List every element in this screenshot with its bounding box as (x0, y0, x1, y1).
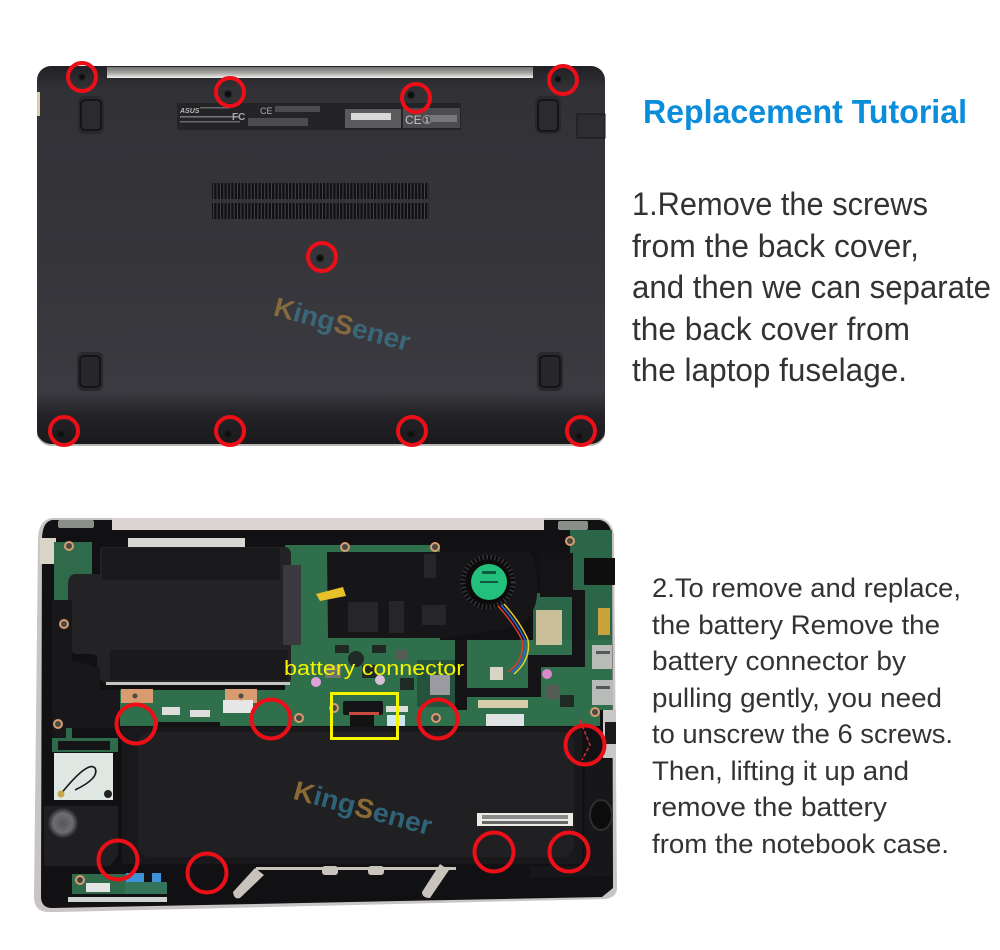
rubber foot: top right (535, 96, 561, 134)
step 2 text: from the notebook case. (652, 829, 949, 859)
regulatory label: ASUS (179, 108, 200, 115)
flat connectors (158, 707, 220, 728)
left speaker (44, 806, 118, 866)
right hinge bracket (558, 521, 588, 530)
heat sink chips (348, 554, 446, 633)
rubber foot: top left (78, 96, 104, 134)
drive side connector (283, 565, 301, 645)
dark cpu surround (417, 660, 455, 707)
watermark: KingSener (271, 292, 414, 357)
main motherboard (120, 545, 612, 726)
heading: Replacement Tutorial (643, 93, 967, 130)
fan wires (498, 604, 528, 674)
screws (58, 74, 582, 439)
battery inner panel (138, 732, 574, 857)
step 2 text (652, 573, 961, 859)
step 2 text: to unscrew the 6 screws. (652, 719, 953, 749)
white sticker (223, 700, 253, 713)
cpu chip (430, 675, 450, 695)
step 1 text: and then we can separate (632, 269, 991, 305)
cable blob (540, 553, 573, 597)
step 2 text: remove the battery (652, 792, 888, 822)
capacitors (311, 669, 552, 687)
rubber foot: bottom left (77, 352, 103, 391)
black chassis interior (41, 520, 613, 908)
panel: laptop back cover (37, 63, 605, 446)
step 1 text: the laptop fuselage. (632, 352, 907, 388)
upper right board (533, 530, 612, 640)
step 1 text: 1.Remove the screws (632, 186, 928, 222)
watermark: KingSener (291, 775, 436, 841)
step 2 text: Then, lifting it up and (652, 756, 909, 786)
step 2 text: battery connector by (652, 646, 907, 676)
silver ribbon (478, 700, 528, 708)
step 1 text (632, 186, 991, 388)
step 1 text: the back cover from (632, 311, 910, 347)
copper screws (54, 537, 599, 728)
step 2 text: the battery Remove the (652, 610, 940, 640)
heat sink (327, 552, 537, 638)
yellow connector label: battery connector (284, 658, 464, 680)
red screw markers (50, 63, 595, 445)
left hinge bracket (58, 520, 94, 528)
step 2 text: 2.To remove and replace, (652, 573, 961, 603)
right wire (580, 720, 590, 760)
regulatory label: FC (232, 112, 245, 123)
battery pack (122, 727, 582, 864)
rubber foot: bottom right (537, 352, 563, 391)
left black wall (52, 600, 120, 740)
laptop base shell (37, 66, 605, 445)
copper board strip (121, 689, 153, 703)
regulatory label (177, 103, 461, 130)
silver chassis (34, 518, 617, 912)
right speaker (530, 760, 612, 878)
cover lower strip (110, 650, 288, 680)
left port notch (37, 92, 40, 116)
hinge bar (112, 518, 544, 530)
right bracket (603, 710, 616, 758)
hinge bar (107, 67, 533, 78)
board chips (325, 645, 574, 707)
step 1 text: from the back cover, (632, 228, 919, 264)
cooling fan (461, 555, 515, 609)
regulatory label: CE (260, 106, 273, 116)
yellow tape (316, 587, 346, 601)
battery connector plug (343, 701, 408, 727)
black heat pipe (455, 590, 585, 710)
touchpad metal tabs (233, 864, 456, 898)
ventilation slots (212, 183, 429, 219)
silver shield (536, 610, 562, 645)
battery label (477, 813, 573, 826)
red screw markers (98, 700, 604, 892)
fan connector (490, 667, 503, 680)
cover upper tab (102, 548, 280, 580)
panel: laptop interior (34, 518, 617, 912)
yellow connector box (332, 694, 398, 738)
step 2 text: pulling gently, you need (652, 683, 942, 713)
left motherboard strip (52, 542, 92, 740)
drive bay black cover (68, 547, 291, 684)
lower daughter board (68, 873, 167, 902)
usb ports and jacks (584, 558, 615, 705)
silver bottom edge (37, 434, 605, 446)
regulatory label: CE① (405, 113, 432, 127)
right corner tab (577, 114, 605, 138)
silver bracket (128, 538, 245, 547)
left port (40, 538, 56, 564)
wifi card (52, 738, 118, 800)
silver rail (106, 682, 290, 685)
